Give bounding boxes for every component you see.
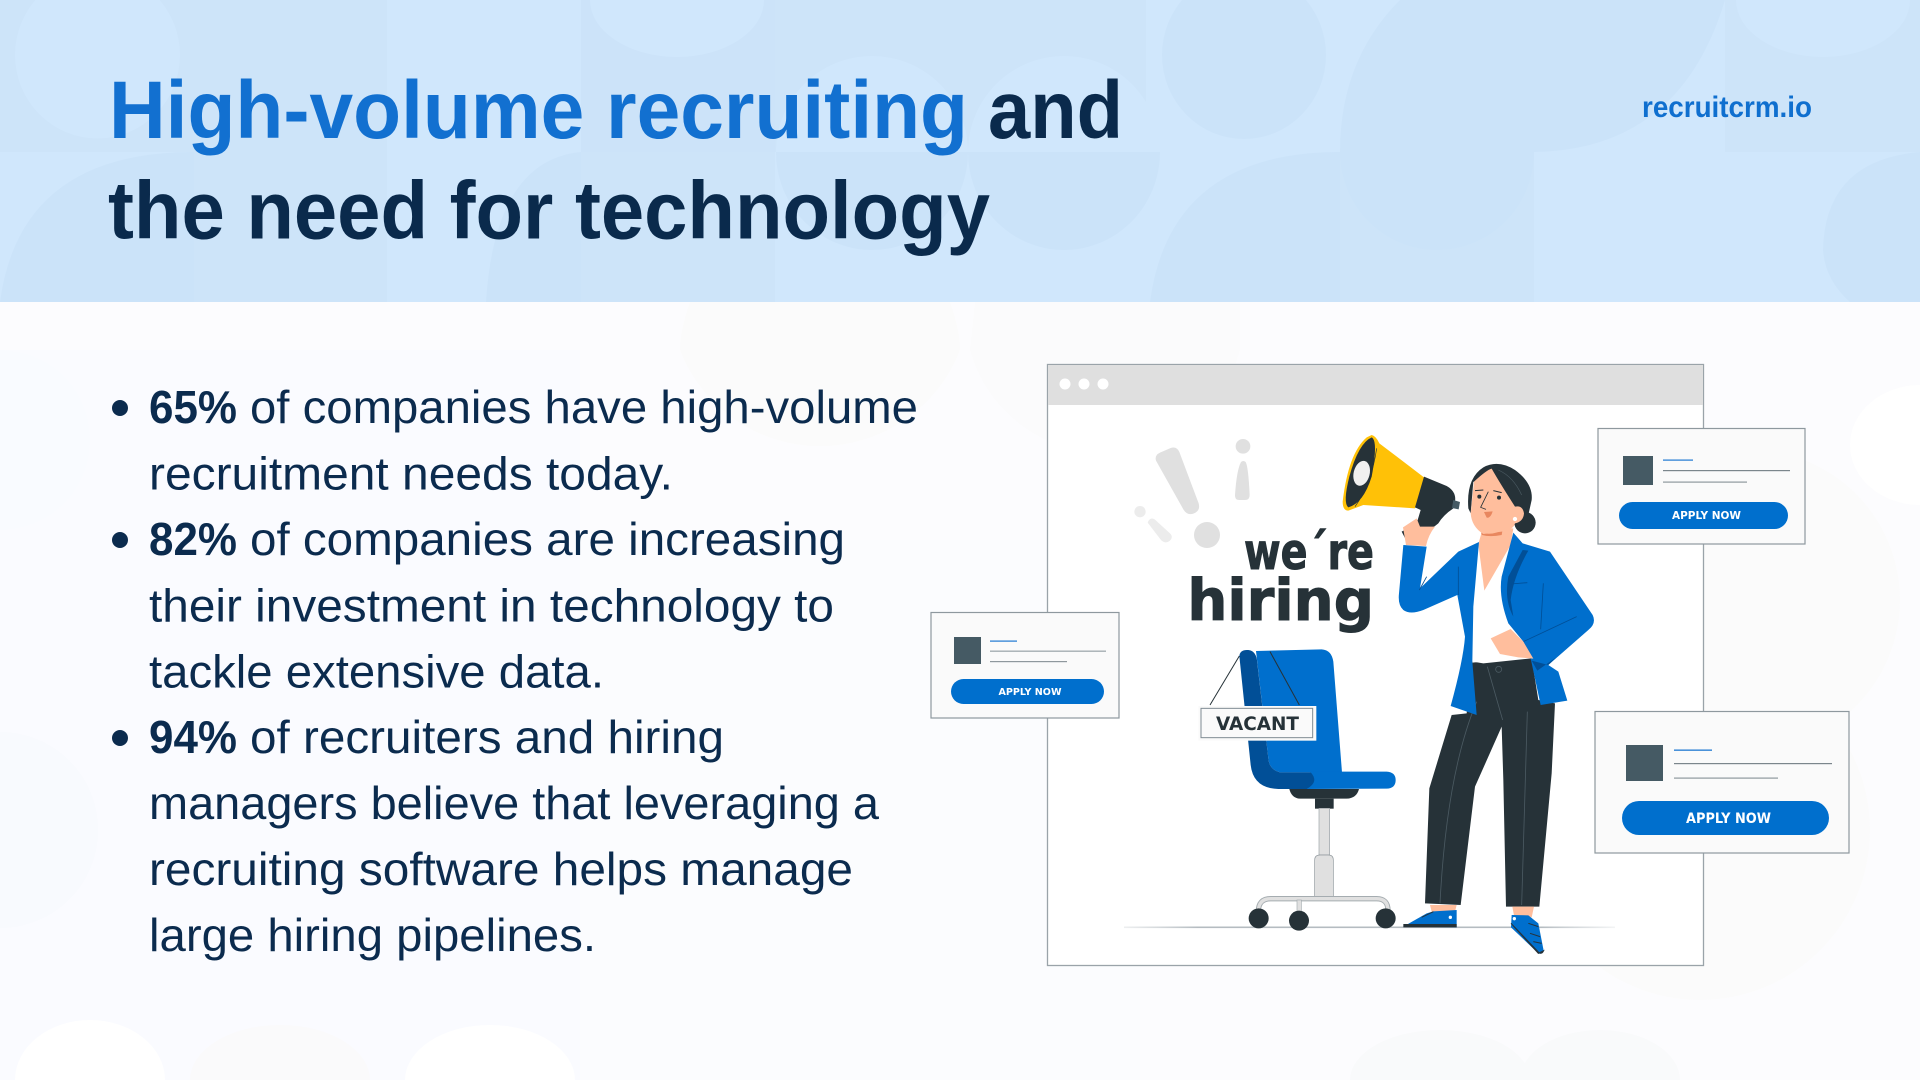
- card text lines: [1663, 460, 1790, 483]
- title: [108, 65, 1123, 256]
- bullet 2: 82%: [112, 513, 845, 698]
- bullet 2: 82%: of companies are increasing: [250, 513, 845, 565]
- bullet 3: 94%: large hiring pipelines.: [149, 909, 596, 961]
- apply now button: APPLY NOW: [1686, 811, 1771, 827]
- bullet 3: 94%: [112, 711, 879, 961]
- woman trousers and shoes: [1403, 658, 1555, 954]
- illustration: office chair: [1198, 649, 1396, 931]
- illustration: woman with megaphone: [1343, 435, 1594, 954]
- illustration: floor line: [1124, 926, 1615, 928]
- title: and: [988, 65, 1123, 156]
- bullet 2: 82%: 82%: [149, 513, 237, 565]
- apply now button: [951, 679, 1104, 704]
- woman hair and face: [1468, 464, 1536, 534]
- woman shirt and neck: [1473, 528, 1518, 663]
- card thumbnail: [954, 637, 981, 664]
- illustration: we're hiring lettering: we´re: [1244, 523, 1374, 581]
- apply now button: APPLY NOW: [998, 687, 1062, 698]
- bullet 1: 65%: 65%: [149, 381, 237, 433]
- title: the need for technology: [108, 166, 990, 256]
- hand holding megaphone: [1403, 518, 1435, 546]
- window title bar: [1048, 365, 1703, 405]
- bullet 3: 94%: recruiting software helps manage: [149, 843, 853, 895]
- woman hand on hip: [1491, 629, 1533, 659]
- apply now button: [1619, 502, 1788, 529]
- illustration: browser window: [1048, 364, 1704, 966]
- bullet 1: 65%: recruitment needs today.: [149, 448, 673, 500]
- card thumbnail: [1626, 745, 1663, 781]
- job card: bottom right: [1595, 712, 1849, 853]
- illustration: gray exclamation marks: [1134, 439, 1250, 548]
- illustration: we're hiring lettering: hiring: [1187, 567, 1374, 634]
- bullet 3: 94%: of recruiters and hiring: [250, 711, 724, 763]
- megaphone: [1343, 435, 1460, 543]
- brand url: recruitcrm.io: [1642, 91, 1812, 124]
- bullet 1: 65%: of companies have high-volume: [250, 381, 918, 433]
- page background pattern: [0, 302, 1920, 1080]
- bullet 3: 94%: 94%: [149, 711, 237, 763]
- bullet list: [112, 381, 918, 961]
- bullet 1: 65%: [112, 381, 918, 500]
- bullet 3: 94%: managers believe that leveraging a: [149, 777, 879, 829]
- card text lines: [990, 640, 1106, 662]
- card text lines: [1674, 750, 1832, 779]
- title: High-volume recruiting: [109, 65, 968, 156]
- job card: left: [931, 612, 1119, 718]
- bullet 2: 82%: tackle extensive data.: [149, 646, 604, 698]
- card thumbnail: [1623, 456, 1653, 485]
- apply now button: [1622, 801, 1829, 835]
- bullet 2: 82%: their investment in technology to: [149, 580, 834, 632]
- woman blue jacket: [1399, 533, 1594, 715]
- header band: [0, 0, 1920, 302]
- illustration: we're hiring lettering: [1187, 523, 1374, 634]
- vacant sign: [1198, 652, 1316, 741]
- vacant sign: VACANT: [1216, 714, 1299, 735]
- job card: top right: [1598, 428, 1805, 544]
- apply now button: APPLY NOW: [1672, 509, 1741, 522]
